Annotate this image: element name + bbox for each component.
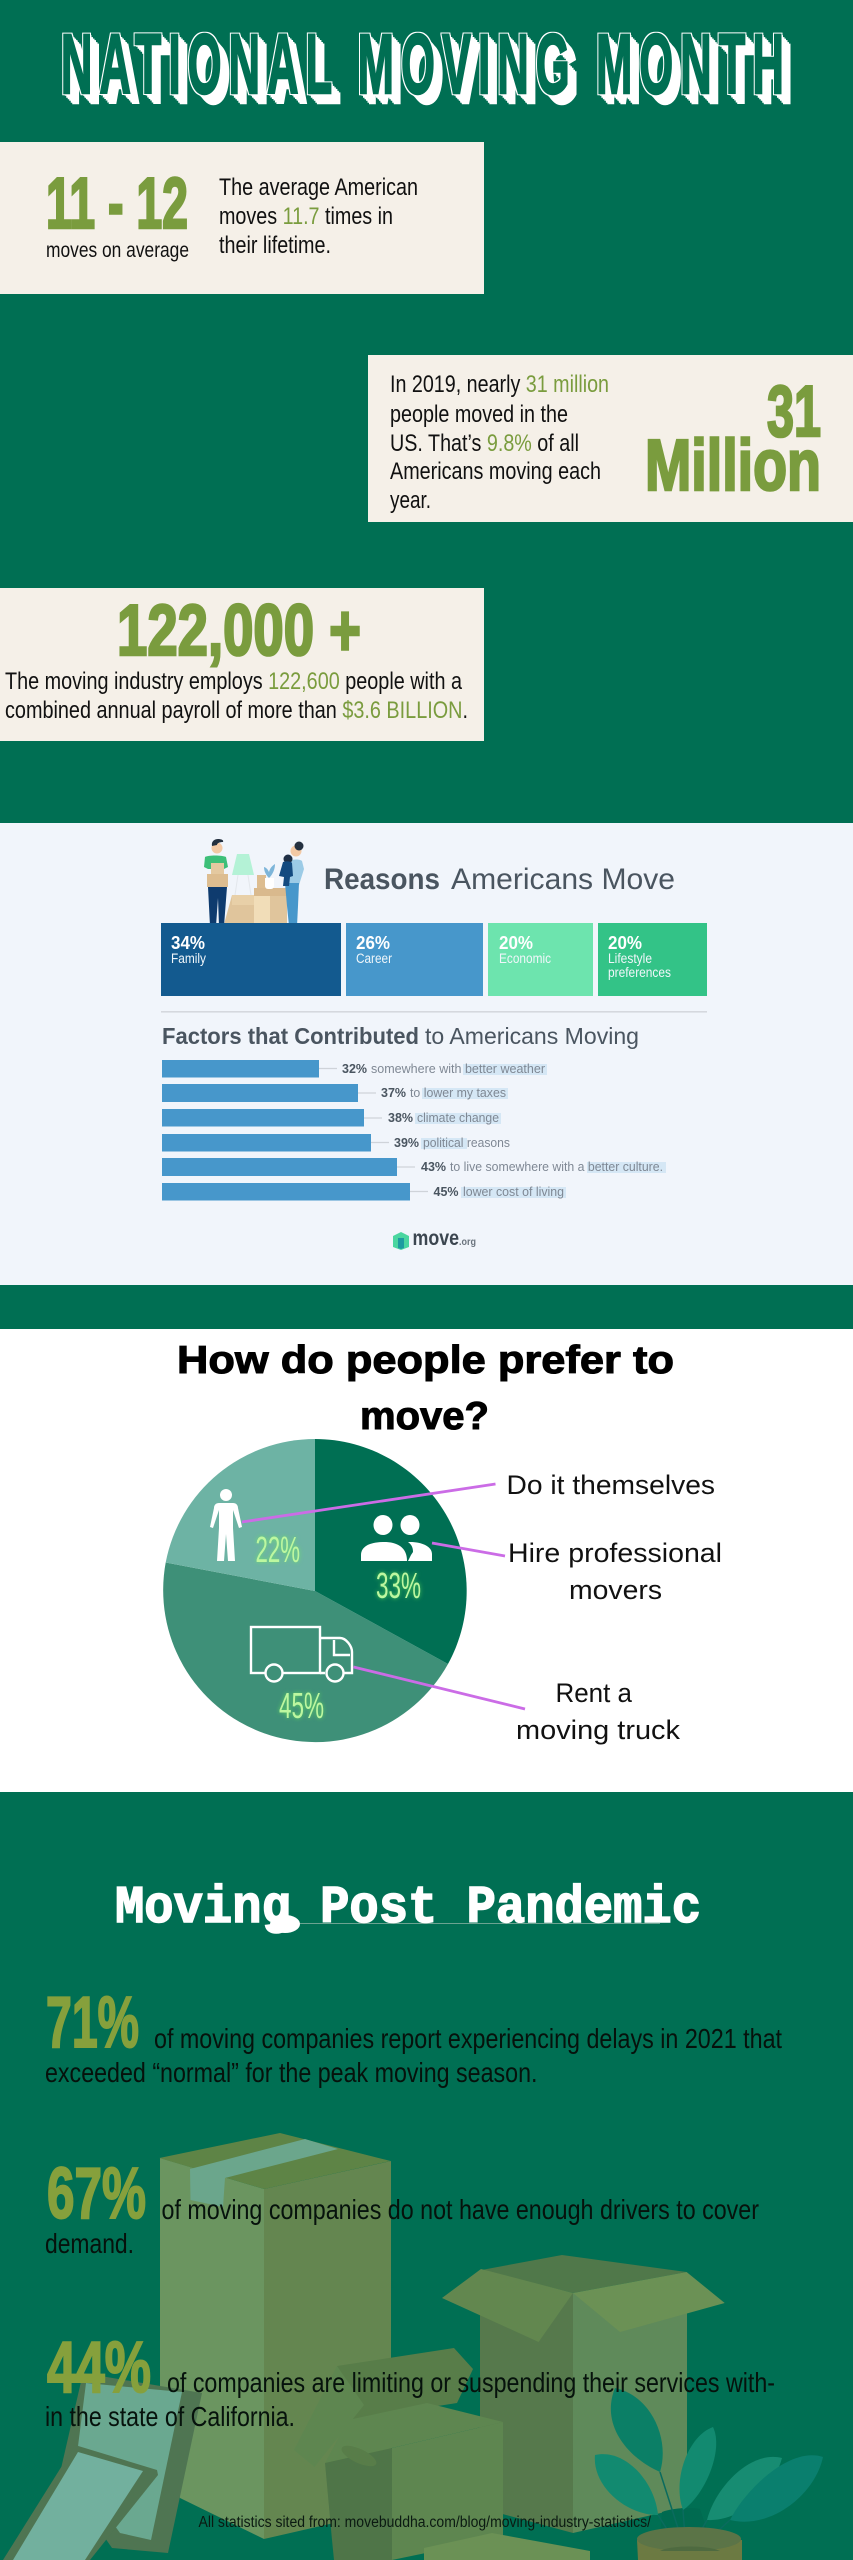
icon: family with boxes bbox=[195, 839, 317, 931]
icon: people bbox=[361, 1515, 432, 1561]
open box bbox=[442, 2255, 725, 2533]
text block: average American: The average American bbox=[219, 174, 418, 201]
text block: 2019 movers: In 2019, nearly 31 million bbox=[390, 371, 609, 398]
panel: average moves bbox=[0, 142, 484, 294]
bar chart: factors bbox=[162, 1060, 666, 1200]
stems bbox=[658, 2472, 730, 2550]
logo: move.org: move bbox=[412, 1227, 459, 1250]
block: family: Family bbox=[171, 951, 206, 966]
text block: employment bbox=[5, 668, 468, 724]
text block: employment: combined annual payroll of more than $3.6 BILLION. bbox=[5, 697, 468, 724]
label: hire professional movers: Hire professional bbox=[508, 1538, 722, 1568]
block: career: Career bbox=[356, 951, 392, 966]
man bbox=[204, 839, 228, 929]
callout lines bbox=[242, 1484, 525, 1709]
block: family: 34% bbox=[171, 933, 205, 953]
slice: hire movers 33% bbox=[315, 1439, 467, 1664]
bar label: 43%: 43% bbox=[421, 1159, 446, 1174]
heading: factors bbox=[162, 1023, 639, 1049]
text block: average American: moves 11.7 times in bbox=[219, 203, 393, 230]
label: rent a moving truck: Rent a bbox=[556, 1678, 633, 1708]
bar label: 38%: climate change bbox=[417, 1110, 499, 1125]
pot bbox=[637, 2540, 742, 2560]
label: rent a moving truck bbox=[516, 1678, 681, 1745]
flat box bbox=[424, 2533, 590, 2560]
heading: factors: Factors that Contributed bbox=[162, 1023, 419, 1049]
block: lifestyle bbox=[598, 923, 707, 996]
label: rent a moving truck: moving truck bbox=[516, 1715, 681, 1745]
percentage: 22%: 22% bbox=[256, 1529, 300, 1570]
block: lifestyle: Lifestyle bbox=[608, 951, 652, 966]
bar label: 45%: 45% bbox=[434, 1184, 459, 1199]
heading: how do people prefer to move: move? bbox=[360, 1395, 489, 1438]
heading: how do people prefer to move bbox=[177, 1339, 674, 1438]
stat: 31 Million: 31 bbox=[767, 372, 821, 452]
text block: 2019 movers: US. That’s 9.8% of all bbox=[390, 430, 579, 457]
block: lifestyle: 20% bbox=[608, 933, 642, 953]
stat: 67% drivers bbox=[45, 2154, 759, 2259]
bar label: 32%: somewhere with better weather bbox=[371, 1061, 546, 1076]
text block: 2019 movers bbox=[390, 371, 609, 514]
heading: how do people prefer to move: How do people prefer to bbox=[177, 1339, 674, 1382]
bar label: 38%: 38% bbox=[388, 1110, 413, 1125]
bar label: 45%: lower cost of living bbox=[463, 1184, 564, 1199]
block: economic: 20% bbox=[499, 933, 533, 953]
logo: move.org bbox=[393, 1227, 476, 1250]
slice: rent truck 45% bbox=[163, 1562, 448, 1742]
label: hire professional movers: movers bbox=[569, 1575, 662, 1605]
source note: All statistics sited from: movebuddha.com/blog/moving-industry-statistics/ bbox=[198, 2514, 652, 2531]
heading: moving post pandemic: Moving Post Pandemic bbox=[115, 1878, 701, 1938]
heading: Reasons Americans Move bbox=[324, 863, 675, 896]
panel: 31 million bbox=[368, 355, 853, 522]
bar label: 39%: 39% bbox=[394, 1135, 419, 1150]
block: career bbox=[346, 923, 483, 996]
stat: 44% California: in the state of California. bbox=[45, 2401, 295, 2432]
heading: Reasons Americans Move: Reasons bbox=[324, 863, 440, 896]
bar label: 39%: political reasons bbox=[423, 1135, 510, 1150]
stat caption: moves on average bbox=[46, 239, 189, 262]
heading: Reasons Americans Move: Americans Move bbox=[451, 863, 675, 896]
text block: 2019 movers: Americans moving each bbox=[390, 458, 601, 485]
text block: average American bbox=[219, 174, 418, 259]
label: hire professional movers bbox=[508, 1538, 722, 1605]
tall taped box bbox=[159, 2133, 391, 2539]
panel: how people prefer to move bbox=[0, 1329, 853, 1792]
stat: 71% delays: 71% bbox=[46, 1983, 139, 2063]
leaves bbox=[611, 2388, 663, 2472]
percentage: 45%: 45% bbox=[279, 1685, 324, 1726]
icon: truck bbox=[251, 1627, 352, 1682]
percentage: 33%: 33% bbox=[376, 1565, 421, 1606]
block: lifestyle: preferences bbox=[608, 965, 671, 980]
slice: do it themselves 22% bbox=[166, 1439, 315, 1591]
stat: 71% delays: exceeded “normal” for the peak moving season. bbox=[45, 2057, 538, 2088]
stat: 44% California bbox=[45, 2328, 775, 2432]
text block: 2019 movers: year. bbox=[390, 487, 431, 514]
stat: 122,000 +: 122,000 + bbox=[117, 591, 361, 671]
block: career: 26% bbox=[356, 933, 390, 953]
label: do it themselves: Do it themselves bbox=[506, 1470, 715, 1500]
block: economic: Economic bbox=[499, 951, 551, 966]
logo: move.org: .org bbox=[459, 1237, 476, 1248]
woman and child bbox=[279, 842, 304, 930]
bar label: 32%: 32% bbox=[342, 1061, 367, 1076]
stat: 67% drivers: demand. bbox=[45, 2228, 134, 2259]
panel: industry employment bbox=[0, 588, 484, 741]
bar label: 37%: 37% bbox=[381, 1085, 406, 1100]
small front box bbox=[294, 2348, 503, 2560]
stat: 67% drivers: 67% bbox=[47, 2154, 146, 2234]
stat: 31 Million bbox=[645, 372, 821, 506]
picture frames bbox=[3, 2373, 202, 2560]
text block: 2019 movers: people moved in the bbox=[390, 401, 568, 428]
text block: average American: their lifetime. bbox=[219, 232, 331, 259]
stat: 11 - 12: 11 - 12 bbox=[46, 164, 188, 244]
stat: 44% California: 44% bbox=[47, 2328, 151, 2408]
block: economic bbox=[488, 923, 593, 996]
bar label: 37%: to lower my taxes bbox=[410, 1085, 506, 1100]
stat: 71% delays bbox=[45, 1983, 782, 2088]
heading: factors: to Americans Moving bbox=[425, 1023, 639, 1049]
bar label: 43%: to live somewhere with a better culture. bbox=[450, 1159, 663, 1174]
potted plant bbox=[595, 2388, 823, 2560]
panel: reasons Americans move bbox=[0, 823, 853, 1285]
text block: employment: The moving industry employs 122,600 people with a bbox=[5, 668, 463, 695]
illustration: moving boxes bbox=[3, 2133, 823, 2560]
block: family bbox=[161, 923, 341, 996]
icon: person bbox=[210, 1489, 242, 1561]
pie chart bbox=[163, 1439, 467, 1742]
